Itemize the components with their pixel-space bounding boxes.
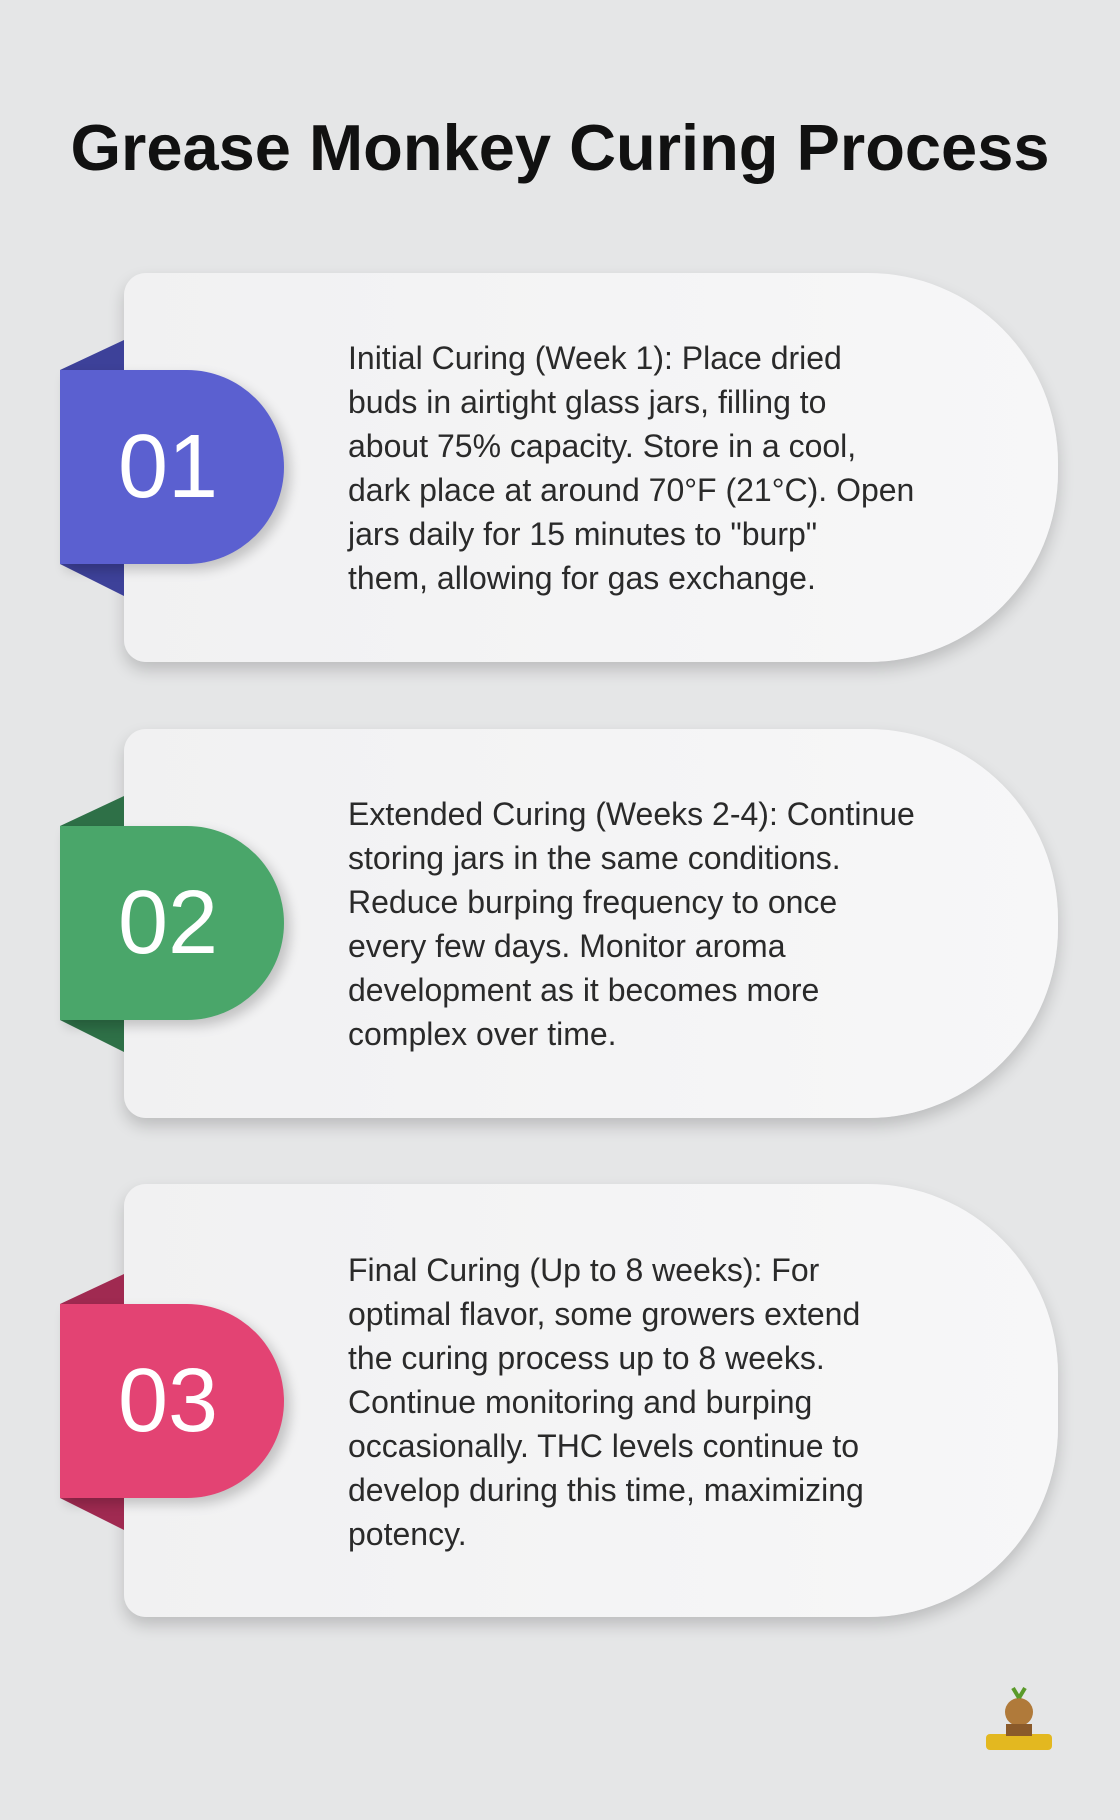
text: step 3: occasionally. THC levels continue to xyxy=(348,1428,859,1464)
panel: step 1 xyxy=(124,273,1058,662)
panel: step 3 xyxy=(124,1184,1058,1617)
badge: 03: 03 xyxy=(118,1351,218,1451)
text: step 2: development as it becomes more xyxy=(348,972,819,1008)
text: step 2: Extended Curing (Weeks 2-4): Continue xyxy=(348,796,915,832)
badge: 02 xyxy=(60,826,284,1020)
text: step 1: them, allowing for gas exchange. xyxy=(348,560,816,596)
text: step 3: Continue monitoring and burping xyxy=(348,1384,812,1420)
text: step 2 xyxy=(348,796,915,1052)
badge: 02: 02 xyxy=(118,873,218,973)
fold: step 2 xyxy=(60,796,124,1052)
panel: step 2 xyxy=(124,729,1058,1118)
text: step 3: potency. xyxy=(348,1516,467,1552)
text: step 1: buds in airtight glass jars, filling to xyxy=(348,384,826,420)
text: step 1: dark place at around 70°F (21°C). Open xyxy=(348,472,914,508)
title: Grease Monkey Curing Process xyxy=(70,111,1050,184)
fold: step 3 xyxy=(60,1274,124,1530)
text: step 3: optimal flavor, some growers extend xyxy=(348,1296,860,1332)
badge: 01: 01 xyxy=(118,417,218,517)
text: step 3: develop during this time, maximizing xyxy=(348,1472,864,1508)
badge: 01 xyxy=(60,370,284,564)
text: step 2: Reduce burping frequency to once xyxy=(348,884,837,920)
text: step 2: every few days. Monitor aroma xyxy=(348,928,786,964)
text: step 3 xyxy=(348,1252,864,1552)
text: step 3: Final Curing (Up to 8 weeks): For xyxy=(348,1252,819,1288)
text: step 1: jars daily for 15 minutes to "burp" xyxy=(348,516,817,552)
logo xyxy=(986,1687,1052,1750)
text: step 1 xyxy=(347,340,914,596)
text: step 2: storing jars in the same conditions. xyxy=(348,840,841,876)
text: step 3: the curing process up to 8 weeks. xyxy=(348,1340,825,1376)
text: step 2: complex over time. xyxy=(348,1016,617,1052)
text: step 1: Initial Curing (Week 1): Place dried xyxy=(348,340,842,376)
fold: step 1 xyxy=(60,340,124,596)
badge: 03 xyxy=(60,1304,284,1498)
text: step 1: about 75% capacity. Store in a cool, xyxy=(348,428,856,464)
